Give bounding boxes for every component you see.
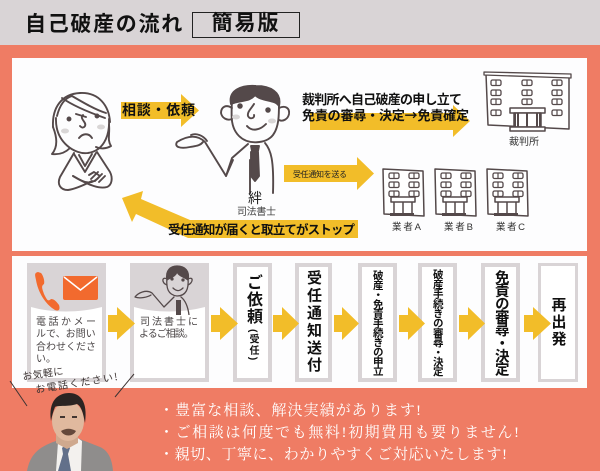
text: consultation [139, 316, 200, 340]
arrow: notice sent [284, 157, 374, 190]
text: court petition: 免責の審尋・決定→免責確定 [302, 105, 469, 124]
step 7: discharge: 免責の審尋・決定 [493, 270, 509, 375]
step 8: fresh start: 再出発 [550, 297, 566, 348]
step 4: notice sent [295, 263, 332, 382]
icon: courthouse [484, 72, 571, 131]
step 4: notice sent: 受任通知送付 [305, 270, 322, 375]
label: court: 裁判所 [509, 135, 539, 148]
step 2: consultation card [130, 263, 209, 382]
title badge: simple version [192, 12, 300, 38]
text: consultation: よるご相談。 [139, 329, 193, 340]
text: court petition [302, 92, 469, 124]
label: creditor C: 業者C [496, 221, 525, 233]
icon: small scrivener [134, 265, 193, 315]
step 6: examination: 破産手続きの審尋・決定 [432, 269, 444, 376]
step 6: examination [418, 263, 457, 382]
text: contact: 合わせくださ [36, 342, 96, 353]
panel: overview background [12, 58, 587, 251]
icon: creditor building B [435, 169, 476, 216]
arrow: court petition [310, 105, 470, 137]
handwritten message: お気軽に [21, 362, 64, 383]
label: Kizuna: 絆 [248, 190, 262, 206]
icon: envelope [63, 276, 98, 300]
benefits list: ・ご相談は何度でも無料!初期費用も要りません! [159, 423, 519, 441]
benefits list: ・親切、丁寧に、わかりやすくご対応いたします! [159, 445, 507, 463]
text: contact: い。 [36, 354, 56, 365]
step 8: fresh start [538, 263, 578, 382]
card white area [134, 307, 205, 378]
panel: steps background [12, 256, 587, 388]
step 1: contact card [27, 263, 106, 382]
label: judicial scrivener: 司法書士 [237, 205, 276, 218]
arrow: consultation [121, 94, 199, 127]
icon: telephone [35, 272, 60, 310]
text: contact: ルで、お問い [36, 329, 96, 340]
text: contact [36, 316, 98, 365]
text: contact: 電話かメー [36, 317, 98, 328]
arrow: collection stops [122, 191, 358, 238]
photo: smiling lawyer [27, 393, 113, 471]
text: consultation: 司法書士に [140, 317, 200, 328]
step label: ご依頼 [244, 274, 261, 325]
icon: creditor building C [487, 169, 528, 216]
title badge: simple version: 簡易版 [212, 12, 280, 35]
arrow label: consultation: 相談・依頼 [122, 102, 195, 118]
step 5: petition: 破産・免責手続きの申立 [372, 270, 384, 375]
label: creditor B: 業者B [444, 221, 473, 233]
arrow label: notice sent: 受任通知を送る [293, 169, 347, 179]
benefits list: ・豊富な相談、解決実績があります! [159, 401, 421, 419]
icon: scrivener man [176, 86, 289, 193]
benefits list [159, 401, 519, 463]
step 3: engagement [233, 263, 272, 382]
icon: worried woman [52, 93, 112, 190]
header band [0, 0, 600, 45]
card white area [31, 307, 102, 378]
text: collection stops: 受任通知が届くと取立てがストップ [168, 222, 355, 237]
text: court petition: 裁判所へ自己破産の申し立て [302, 92, 462, 107]
handwritten message: お電話ください! [34, 368, 118, 396]
step 5: petition [358, 263, 397, 382]
speech lines [10, 374, 134, 406]
icon: creditor building A [383, 169, 424, 216]
step 7: discharge [481, 263, 520, 382]
label: creditor A: 業者A [392, 221, 422, 233]
step sublabel: (受任) [247, 329, 258, 362]
title: 自己破産の流れ [25, 13, 184, 36]
